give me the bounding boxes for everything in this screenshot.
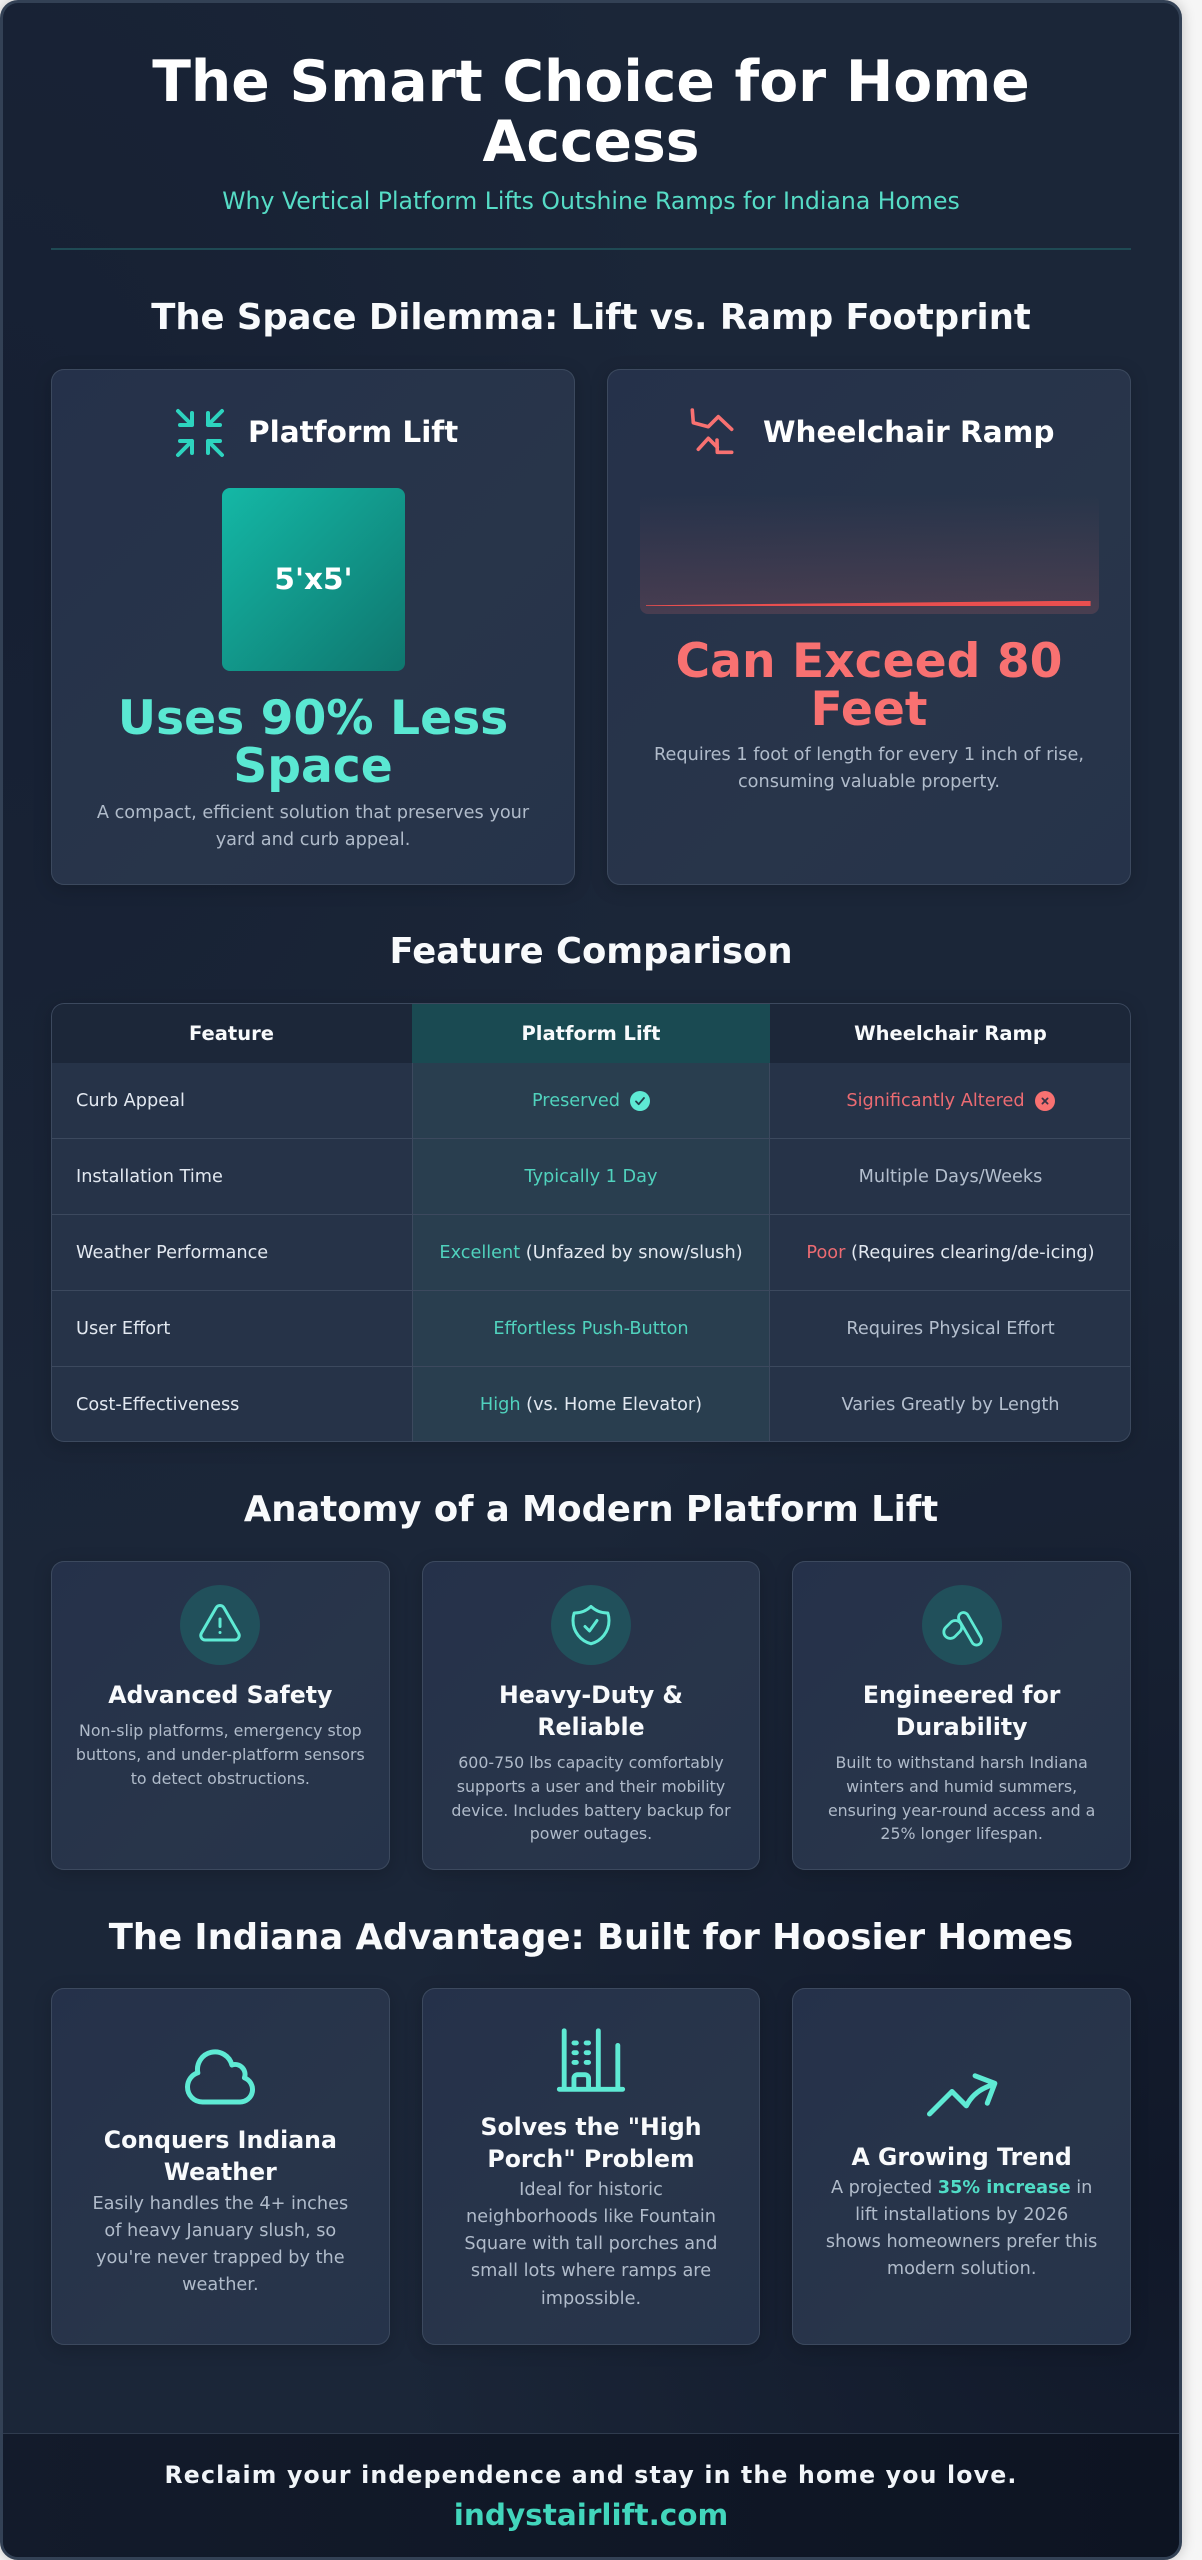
heading: space dilemma: The Space Dilemma: Lift vs. Ramp Footprint <box>151 296 1031 338</box>
row: weather performance <box>51 1215 1131 1291</box>
card text: you're never trapped by the <box>96 2248 345 2268</box>
card text <box>826 2178 1097 2279</box>
icon: cloud <box>185 2049 255 2104</box>
panel heading: Wheelchair Ramp <box>763 415 1054 449</box>
ramp length visual <box>640 523 1099 614</box>
row: curb appeal: Preserved <box>532 1090 620 1110</box>
stat: can exceed 80 feet <box>675 634 1063 736</box>
icon: wrench <box>922 1585 1002 1665</box>
title: Access <box>482 109 700 175</box>
stat: uses 90% less space: Uses 90% Less <box>118 690 508 746</box>
title <box>152 49 1030 175</box>
description <box>97 802 530 850</box>
panel: durability <box>792 1561 1131 1870</box>
card text: A projected 35% increase in <box>831 2178 1092 2198</box>
card text <box>828 1753 1095 1843</box>
column header row: Platform Lift <box>522 1022 660 1044</box>
heading: anatomy: Anatomy of a Modern Platform Lift <box>244 1489 938 1530</box>
row: weather performance: Excellent (Unfazed by snow/slush) <box>439 1242 743 1262</box>
description: A compact, efficient solution that preserves your <box>97 802 529 822</box>
card title: Engineered for <box>863 1681 1060 1709</box>
card text <box>92 2194 348 2295</box>
row: weather performance: Weather Performance <box>76 1242 268 1262</box>
row: installation time <box>51 1139 1131 1215</box>
row: cost-effectiveness: Cost-Effectiveness <box>76 1394 239 1414</box>
card text: 25% longer lifespan. <box>880 1824 1043 1843</box>
card title <box>863 1681 1060 1741</box>
card text: buttons, and under-platform sensors <box>76 1745 365 1764</box>
row: installation time: Installation Time <box>76 1166 223 1186</box>
heading: indiana advantage: The Indiana Advantage: Built for Hoosier Homes <box>109 1916 1073 1958</box>
column header row <box>51 1003 1131 1063</box>
card title: Advanced Safety <box>108 1681 332 1709</box>
stat: uses 90% less space: Space <box>233 738 393 794</box>
card text <box>76 1721 365 1788</box>
card text: Ideal for historic <box>519 2180 663 2200</box>
card text: shows homeowners prefer this <box>826 2232 1097 2252</box>
panel: heavy-duty <box>422 1561 760 1870</box>
comparison table <box>51 1003 1131 1442</box>
card text: Built to withstand harsh Indiana <box>836 1753 1088 1772</box>
card text: neighborhoods like Fountain <box>466 2207 716 2227</box>
card title: A Growing Trend <box>852 2143 1072 2171</box>
card text: small lots where ramps are <box>471 2261 711 2281</box>
row: user effort: Requires Physical Effort <box>846 1318 1055 1338</box>
lift footprint square <box>222 488 405 671</box>
description <box>654 745 1084 792</box>
card title: Conquers Indiana <box>104 2126 337 2154</box>
row: user effort: Effortless Push-Button <box>493 1318 689 1338</box>
icon: shield check <box>551 1585 631 1665</box>
card title: Porch" Problem <box>487 2145 695 2173</box>
card text: 600-750 lbs capacity comfortably <box>458 1753 724 1772</box>
description: Requires 1 foot of length for every 1 inch of rise, <box>654 745 1084 765</box>
card text: Non-slip platforms, emergency stop <box>79 1721 362 1740</box>
row: cost-effectiveness <box>76 1367 1060 1441</box>
lift footprint square: 5'x5' <box>274 562 353 596</box>
card text: device. Includes battery backup for <box>451 1801 731 1820</box>
description: consuming valuable property. <box>738 772 1000 792</box>
row: curb appeal <box>51 1063 1131 1139</box>
card text: winters and humid summers, <box>846 1777 1077 1796</box>
footer tagline: Reclaim your independence and stay in the home you love. <box>164 2461 1018 2489</box>
footer website: indystairlift.com <box>454 2498 728 2532</box>
card title: Weather <box>164 2158 277 2186</box>
card title: Heavy-Duty & <box>499 1681 683 1709</box>
stat: can exceed 80 feet: Can Exceed 80 <box>675 634 1063 688</box>
card title <box>480 2113 702 2173</box>
panel: wheelchair ramp <box>607 368 1131 884</box>
title: The Smart Choice for Home <box>152 49 1030 115</box>
footer <box>3 2433 1179 2557</box>
card text: impossible. <box>541 2289 641 2309</box>
subtitle: Why Vertical Platform Lifts Outshine Ramps for Indiana Homes <box>222 186 960 214</box>
row: installation time: Multiple Days/Weeks <box>859 1166 1042 1186</box>
panel heading: Platform Lift <box>248 415 458 449</box>
card text: weather. <box>182 2275 259 2295</box>
icon: building <box>556 2028 626 2092</box>
column header row: Feature <box>189 1022 274 1044</box>
card text: modern solution. <box>887 2259 1036 2279</box>
icon: arrows pointing in <box>176 408 224 458</box>
description: yard and curb appeal. <box>216 830 410 850</box>
card title: Reliable <box>537 1713 645 1741</box>
column header row: Wheelchair Ramp <box>854 1022 1047 1044</box>
card text: power outages. <box>530 1824 652 1843</box>
panel: advanced safety <box>51 1561 390 1870</box>
card text: to detect obstructions. <box>131 1769 310 1788</box>
row: cost-effectiveness: Varies Greatly by Length <box>841 1394 1060 1414</box>
stat: can exceed 80 feet: Feet <box>811 682 927 736</box>
card text: supports a user and their mobility <box>457 1777 725 1796</box>
card text: Easily handles the 4+ inches <box>92 2194 348 2214</box>
card text: lift installations by 2026 <box>855 2205 1068 2225</box>
row: user effort <box>51 1291 1131 1367</box>
card text: Square with tall porches and <box>464 2234 718 2254</box>
panel: high porch <box>422 1988 760 2345</box>
row: curb appeal: Significantly Altered <box>846 1090 1025 1110</box>
stat: uses 90% less space <box>118 690 508 794</box>
card text <box>451 1753 731 1843</box>
card title <box>104 2126 337 2186</box>
row: user effort: User Effort <box>76 1318 170 1338</box>
icon: ramp <box>690 408 734 454</box>
row: weather performance: Poor (Requires clearing/de-icing) <box>806 1242 1095 1262</box>
card title <box>499 1681 683 1741</box>
panel: indiana weather <box>51 1988 390 2345</box>
card text <box>464 2180 718 2309</box>
row: curb appeal: Curb Appeal <box>76 1090 185 1110</box>
card title: Durability <box>896 1713 1028 1741</box>
row: installation time: Typically 1 Day <box>525 1166 657 1186</box>
panel: growing trend <box>792 1988 1131 2345</box>
icon: warning triangle <box>180 1585 260 1665</box>
row: cost-effectiveness: High (vs. Home Elevator) <box>480 1394 702 1414</box>
icon: trending up <box>927 2073 998 2116</box>
heading: feature comparison: Feature Comparison <box>389 931 793 972</box>
card text: of heavy January slush, so <box>104 2221 336 2241</box>
card title: Solves the "High <box>480 2113 702 2141</box>
card text: ensuring year-round access and a <box>828 1801 1095 1820</box>
panel: platform lift <box>51 368 575 884</box>
